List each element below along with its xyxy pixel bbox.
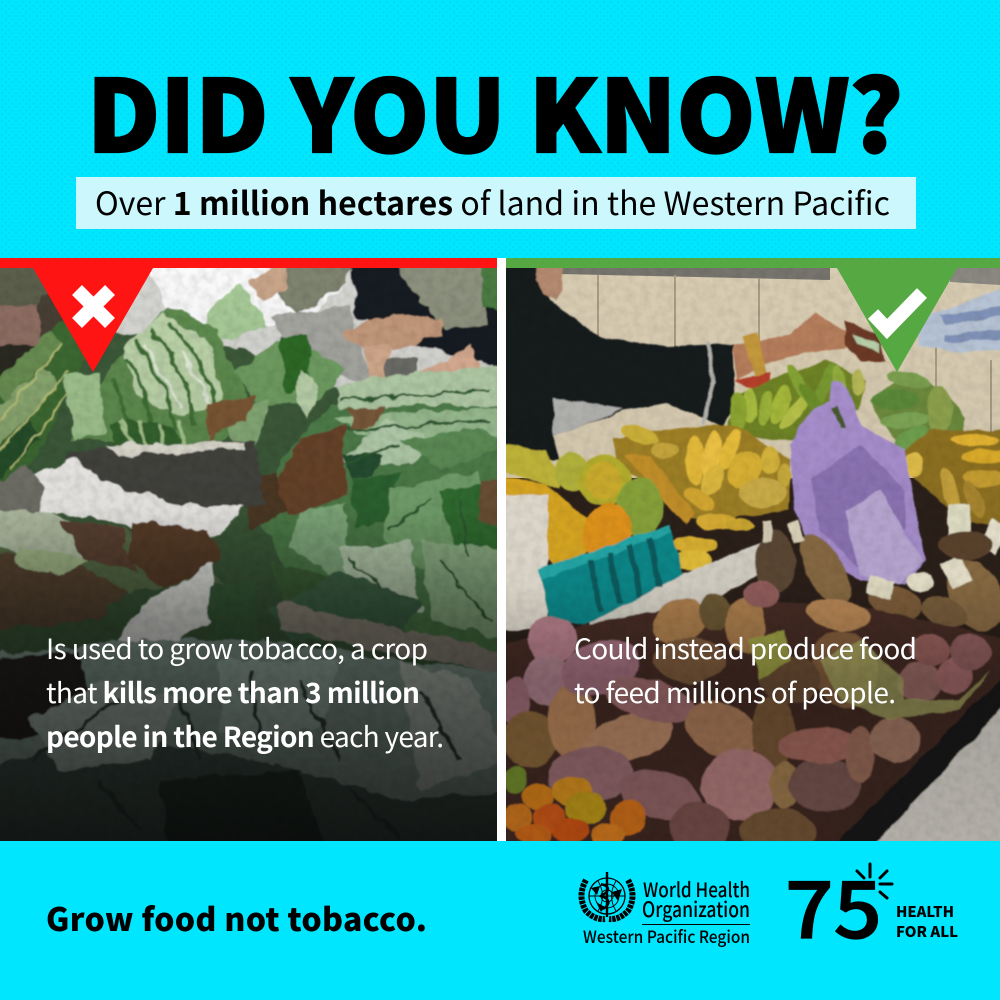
top-left corner and brick bbox=[0, 268, 48, 308]
bottom leaf mass bbox=[0, 636, 497, 802]
large green plantain hand bbox=[870, 382, 966, 451]
text: tobacco statement: people in the Region each year. bbox=[46, 716, 444, 756]
text: tobacco statement bbox=[46, 628, 444, 756]
panel: tobacco photo bbox=[0, 260, 510, 860]
note bbox=[852, 335, 880, 352]
footer slogan: Grow food not tobacco. bbox=[46, 895, 427, 941]
text: food statement: Could instead produce food bbox=[574, 628, 917, 668]
yellow bananas middle bbox=[613, 425, 790, 520]
photo grain on market photo bbox=[506, 268, 1000, 841]
red header bar bbox=[0, 258, 497, 268]
red and white items bbox=[734, 371, 772, 390]
floor bbox=[116, 268, 494, 388]
icon: red cross badge bbox=[33, 268, 153, 372]
dark overlay on market photo bbox=[506, 502, 1000, 841]
tomatoes bbox=[503, 766, 646, 847]
sweet potato crate bbox=[500, 600, 1000, 860]
text: food statement bbox=[574, 628, 917, 712]
photo grain on tobacco photo bbox=[0, 268, 497, 632]
text: food statement: to feed millions of people. bbox=[574, 672, 896, 712]
panel: food market photo bbox=[500, 262, 1000, 860]
logo: WHO wordmark: World Health bbox=[643, 874, 750, 903]
fruit on left bbox=[500, 445, 562, 490]
brown dried leaves bbox=[204, 394, 256, 442]
green bananas bbox=[725, 360, 865, 440]
sweet potatoes bbox=[500, 582, 990, 856]
text: tobacco statement: that kills more than 3 million bbox=[46, 672, 420, 712]
logo: WHO wordmark: Organization bbox=[642, 894, 750, 924]
footer band bbox=[0, 841, 1000, 1000]
dark mat bbox=[60, 440, 265, 510]
tiled wall bbox=[506, 268, 1000, 490]
seated person bbox=[349, 268, 497, 368]
logo: WHO 75 mark: 75 bbox=[785, 846, 882, 961]
arm and hand bbox=[733, 312, 850, 380]
central leaf pile bbox=[70, 307, 248, 446]
white bag behind bbox=[553, 398, 623, 437]
logo: WHO 75 mark: HEALTH bbox=[896, 901, 954, 922]
right leaf pile bbox=[260, 402, 497, 652]
dotted header texture bbox=[0, 0, 1000, 258]
white cloth bbox=[33, 456, 244, 538]
taro roots bbox=[755, 530, 795, 594]
sleeve bbox=[277, 268, 354, 314]
logo: WHO wordmark bbox=[583, 874, 750, 948]
title: DID YOU KNOW? bbox=[87, 37, 903, 181]
purple bag bbox=[789, 382, 925, 585]
icon: green check badge bbox=[837, 268, 957, 372]
held leaf bbox=[200, 284, 267, 340]
logo: WHO 75 mark bbox=[785, 846, 958, 961]
white table ledge bbox=[588, 542, 761, 626]
sleeve trim bbox=[703, 342, 714, 425]
woman's black garment bbox=[500, 262, 735, 460]
logo: WHO 75 mark: FOR ALL bbox=[896, 921, 958, 942]
white gutter between photos bbox=[497, 258, 506, 841]
logo: WHO emblem bbox=[582, 872, 632, 919]
basket bbox=[538, 525, 683, 625]
woman's face bbox=[536, 262, 563, 300]
dark overlay on tobacco photo bbox=[0, 379, 497, 841]
subtitle banner: Over 1 million hectares of land in the Western Pacific bbox=[95, 179, 890, 225]
rolled bales bbox=[0, 318, 85, 490]
logo: WHO wordmark: Western Pacific Region bbox=[583, 923, 750, 948]
lower left leaves bbox=[0, 508, 84, 559]
striped shirt bbox=[918, 285, 1000, 352]
text: tobacco statement: Is used to grow tobacco, a crop bbox=[46, 628, 428, 668]
right bananas bbox=[905, 430, 1000, 530]
green header bar bbox=[506, 258, 1000, 268]
